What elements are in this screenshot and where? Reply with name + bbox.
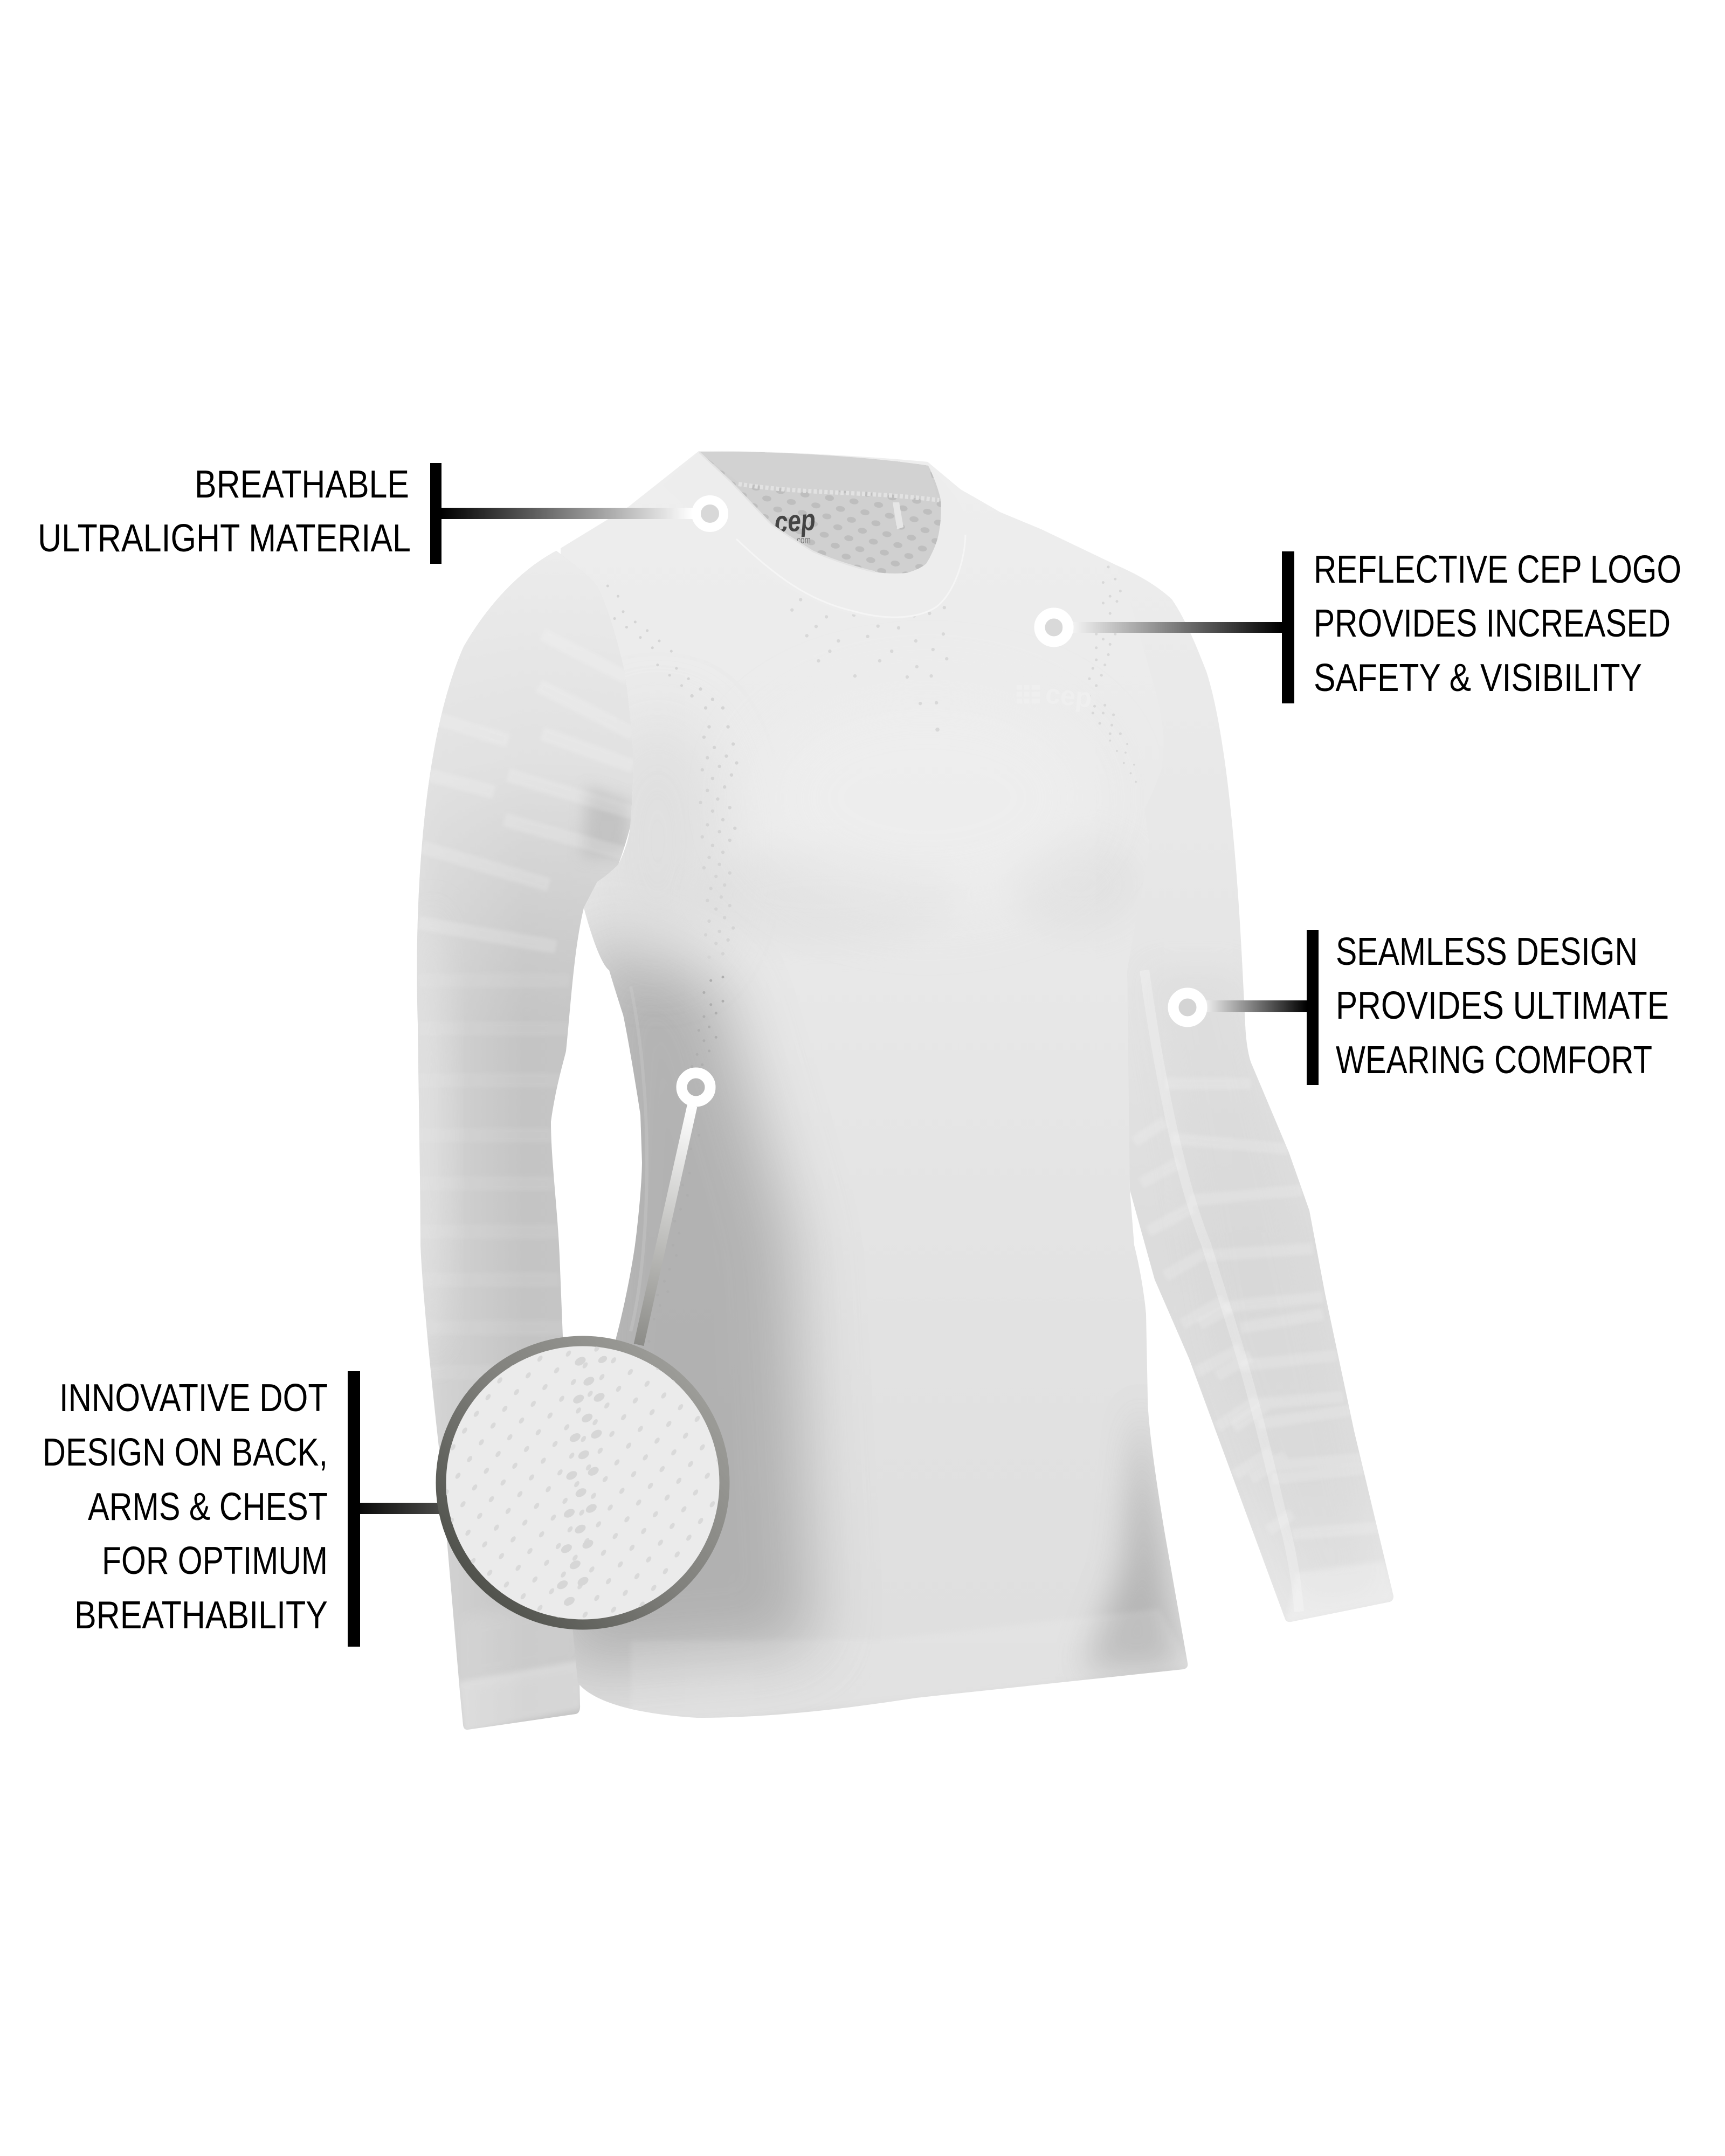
text [38, 462, 411, 560]
left sleeve [410, 544, 641, 1736]
magnifier lens [441, 1341, 728, 1628]
side seam [631, 986, 647, 1331]
back collar rib [699, 452, 938, 499]
callout: reflective logo [1039, 548, 1681, 703]
marker [1173, 993, 1202, 1022]
chest logo: cep [1044, 678, 1093, 714]
text: ULTRALIGHT MATERIAL [38, 516, 411, 560]
pointer line to side marker [639, 1106, 692, 1345]
collar seam [736, 535, 965, 617]
lower side perforation dots [647, 976, 724, 1343]
text: SAFETY & VISIBILITY [1314, 656, 1642, 700]
left cuff [458, 1660, 582, 1733]
bar [1282, 551, 1294, 703]
right shoulder and chest perforation dots [790, 565, 1137, 783]
hem band [631, 1609, 1191, 1719]
shirt photo [410, 442, 1407, 1736]
forearm seam [1175, 1128, 1285, 1510]
hanger tab [893, 502, 903, 529]
text: FOR OPTIMUM [102, 1539, 328, 1583]
connector [1198, 1000, 1307, 1012]
text: SEAMLESS DESIGN [1336, 930, 1638, 973]
torso [555, 442, 1197, 1725]
bar [430, 463, 441, 564]
right sleeve [1117, 565, 1393, 1622]
text: DESIGN ON BACK, [43, 1431, 328, 1474]
connector [1062, 622, 1282, 633]
text: ARMS & CHEST [88, 1485, 328, 1529]
bottom right shadow [1084, 1401, 1181, 1671]
callout: innovative dot design [43, 1073, 728, 1647]
marker [696, 500, 723, 527]
fabric holes [555, 1355, 608, 1607]
bar [348, 1371, 360, 1647]
bar [1307, 930, 1319, 1085]
callout: breathable ultralight material [38, 462, 723, 564]
neck inside: com [797, 535, 811, 545]
collar band [663, 452, 966, 619]
text [1314, 548, 1681, 700]
text [43, 1376, 328, 1637]
text: INNOVATIVE DOT [59, 1376, 328, 1420]
right cuff [1286, 1560, 1396, 1623]
connector [441, 508, 693, 519]
callout: seamless design [1173, 930, 1669, 1085]
neck inside [695, 447, 949, 577]
side marker [681, 1073, 710, 1102]
marker [1039, 613, 1068, 641]
text: BREATHABILITY [74, 1593, 328, 1637]
text: WEARING COMFORT [1336, 1038, 1652, 1082]
text [1336, 930, 1669, 1082]
text: BREATHABLE [195, 462, 409, 506]
chest logo [1017, 678, 1093, 714]
left torso shadow [555, 927, 814, 1671]
left perforation dots [606, 584, 739, 959]
connector [360, 1503, 441, 1514]
inner label: cep [773, 502, 817, 539]
